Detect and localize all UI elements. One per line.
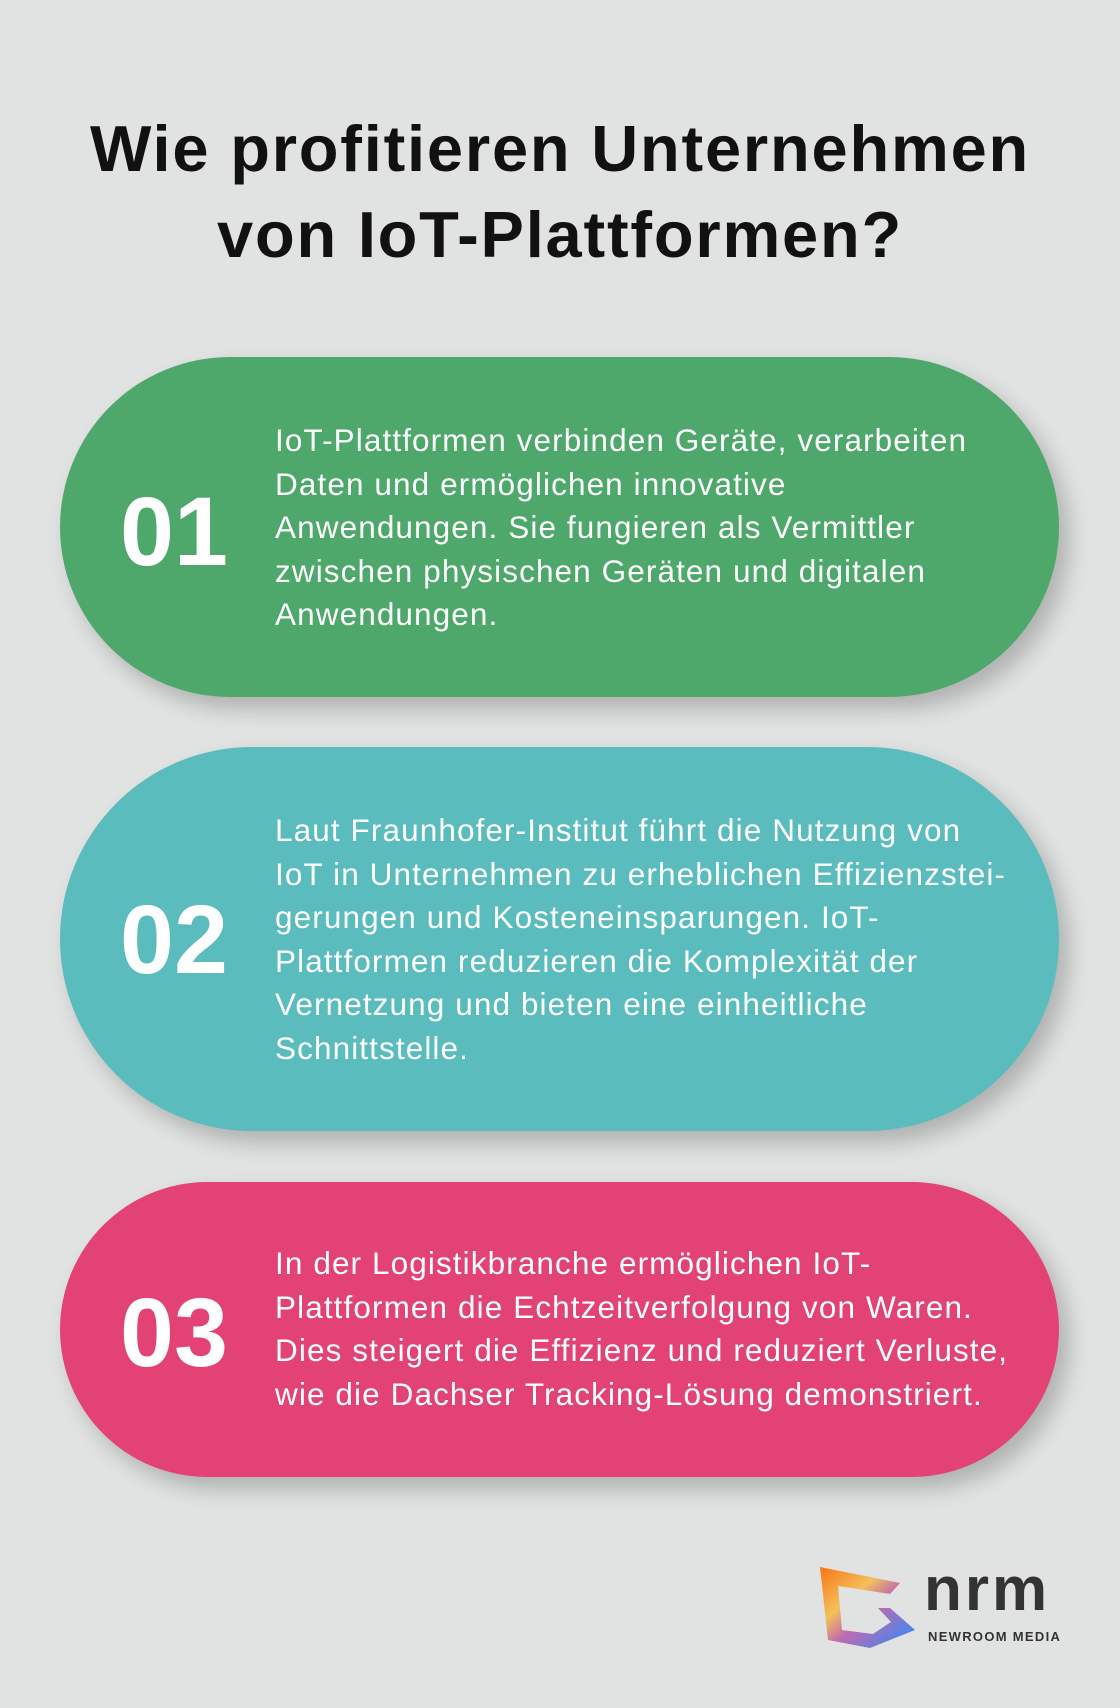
text 02: IoT in Unternehmen zu erheblichen Effizienzstei- bbox=[275, 856, 1006, 892]
panel: 03 bbox=[60, 1182, 1059, 1477]
text 01: IoT-Plattformen verbinden Geräte, verarbeiten bbox=[275, 422, 967, 458]
text 01 bbox=[275, 422, 967, 632]
number 03: 03 bbox=[120, 1278, 228, 1387]
logo text: nrm bbox=[924, 1555, 1050, 1624]
title bbox=[90, 112, 1030, 271]
text 03: Dies steigert die Effizienz und reduziert Verluste, bbox=[275, 1332, 1008, 1368]
text 03: wie die Dachser Tracking-Lösung demonstriert. bbox=[275, 1376, 983, 1412]
logo bbox=[820, 1555, 1061, 1648]
text 02: Vernetzung und bieten eine einheitliche bbox=[275, 986, 868, 1022]
panel: 01 bbox=[60, 357, 1059, 697]
text 01: zwischen physischen Geräten und digitalen bbox=[275, 553, 926, 589]
panel: 02 bbox=[60, 747, 1059, 1131]
logo: NEWROOM MEDIA bbox=[928, 1629, 1061, 1644]
text 03 bbox=[275, 1245, 1008, 1412]
text 03: In der Logistikbranche ermöglichen IoT- bbox=[275, 1245, 871, 1281]
text 02: Plattformen reduzieren die Komplexität der bbox=[275, 943, 918, 979]
text 01: Anwendungen. Sie fungieren als Vermittler bbox=[275, 509, 915, 545]
text 02: Schnittstelle. bbox=[275, 1030, 469, 1066]
icon: logo mark bbox=[820, 1567, 915, 1648]
number 01: 01 bbox=[120, 477, 228, 586]
text 01: Anwendungen. bbox=[275, 596, 498, 632]
text 02 bbox=[275, 812, 1006, 1066]
title: Wie profitieren Unternehmen bbox=[90, 112, 1030, 185]
text 01: Daten und ermöglichen innovative bbox=[275, 466, 786, 502]
text 02: Laut Fraunhofer-Institut führt die Nutzung von bbox=[275, 812, 961, 848]
text 02: gerungen und Kosteneinsparungen. IoT- bbox=[275, 899, 880, 935]
title: von IoT-Plattformen? bbox=[217, 198, 903, 271]
number 02: 02 bbox=[120, 885, 228, 994]
text 03: Plattformen die Echtzeitverfolgung von Waren. bbox=[275, 1289, 973, 1325]
